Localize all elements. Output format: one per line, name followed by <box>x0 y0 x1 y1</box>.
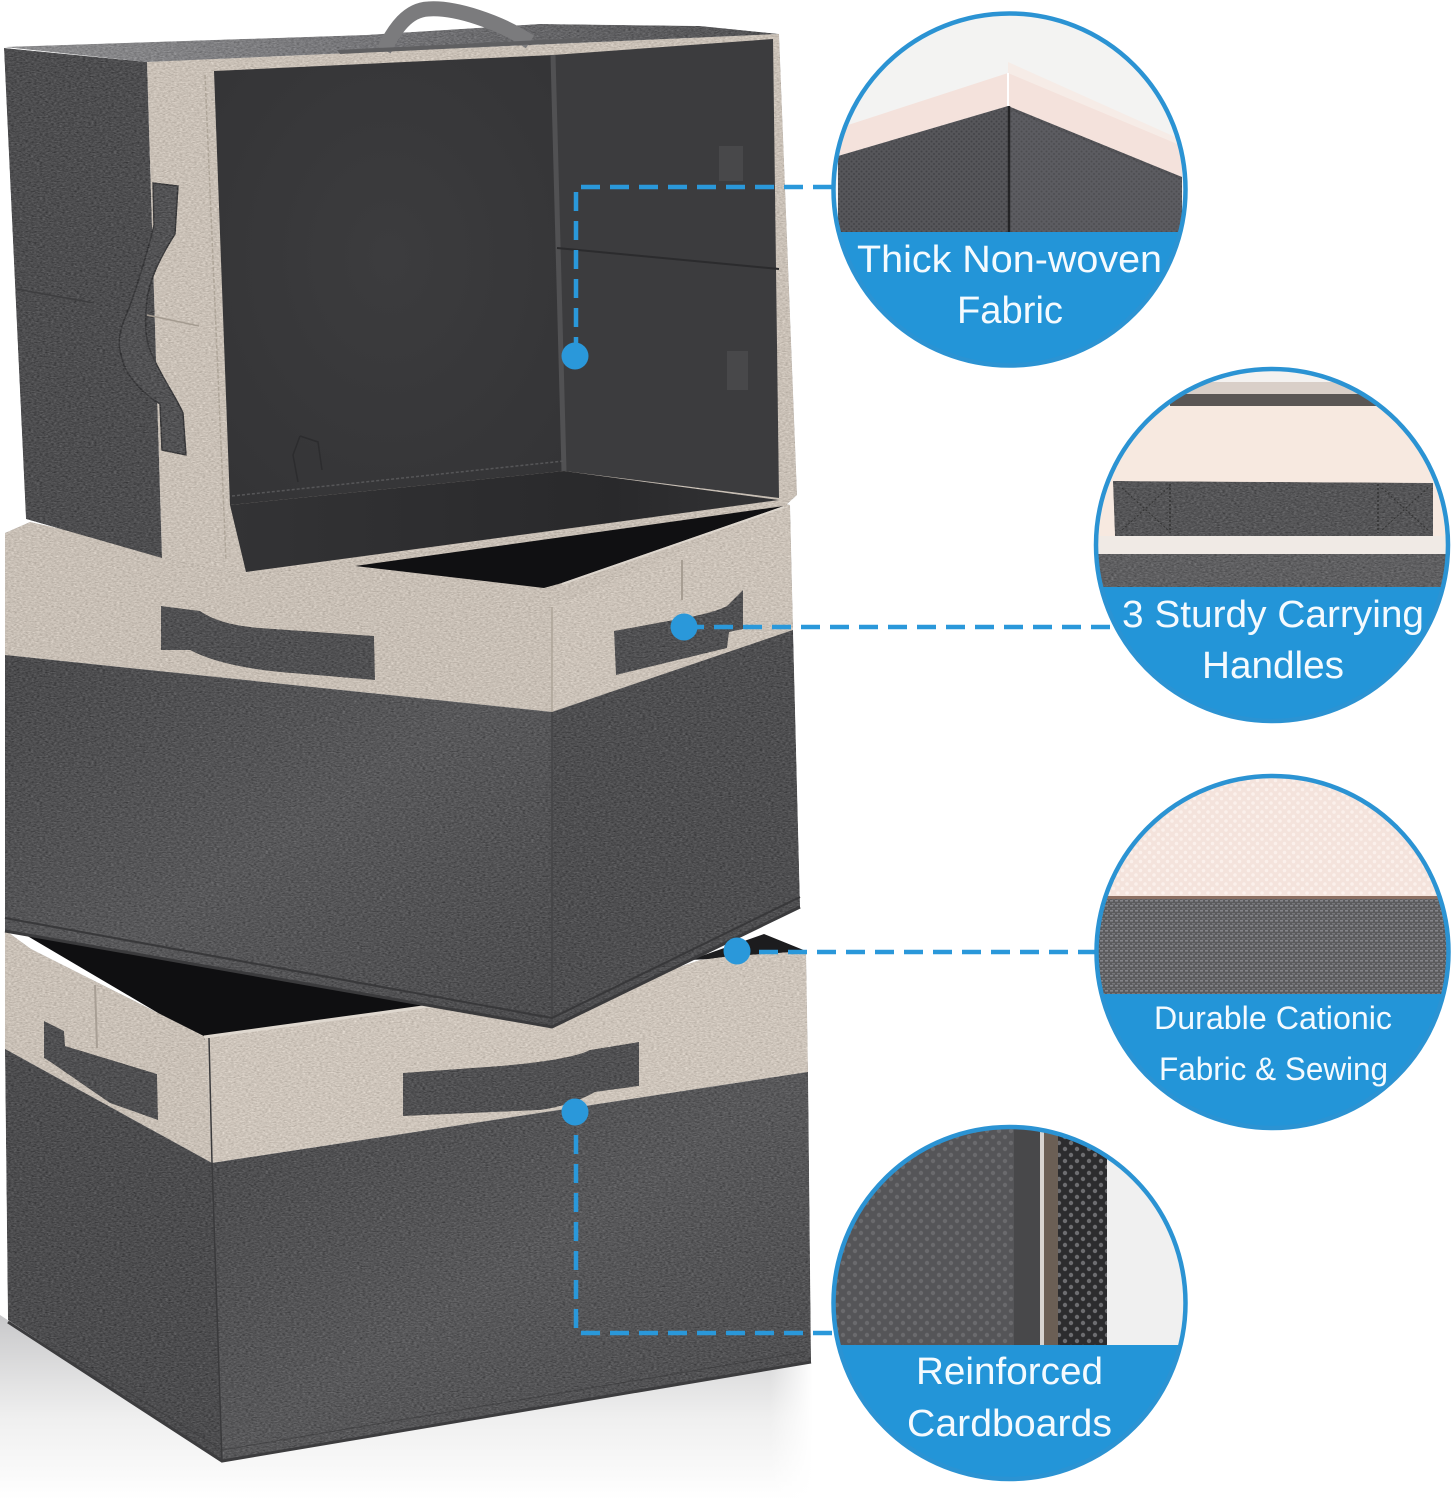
caption <box>1122 594 1424 687</box>
bottom bin fabric faces <box>5 930 811 1461</box>
detail photo: handle <box>1095 365 1450 727</box>
detail photo: fabric corner <box>830 10 1190 372</box>
callout line: reinforced cardboards <box>562 1098 832 1333</box>
top bin interior <box>214 39 779 572</box>
circle outline <box>1096 369 1448 721</box>
detail photo: woven fabric <box>1095 772 1451 1134</box>
caption <box>907 1351 1112 1445</box>
middle bin fabric faces <box>5 498 800 1026</box>
middle bin side handle <box>614 590 743 675</box>
middle storage bin <box>5 498 800 1027</box>
caption: Reinforced <box>916 1351 1103 1393</box>
caption: 3 Sturdy Carrying <box>1122 594 1424 636</box>
middle bin opening <box>355 506 784 588</box>
caption: Durable Cationic <box>1154 1000 1392 1036</box>
caption: Fabric <box>957 290 1063 332</box>
top bin carry handle <box>384 9 530 50</box>
circle outline <box>834 14 1186 366</box>
floor reflection <box>0 1315 813 1500</box>
panel: reinforced cardboards <box>830 1124 1190 1485</box>
top bin outer faces <box>4 24 797 576</box>
top bin fold lines <box>16 75 226 560</box>
caption: Handles <box>1202 645 1344 687</box>
top bin side handle <box>119 183 186 455</box>
callout line: carrying handles <box>670 614 1110 640</box>
bottom bin front handle <box>403 1042 639 1116</box>
caption: Thick Non-woven <box>857 239 1162 281</box>
middle bin seams <box>5 507 800 1027</box>
caption <box>1154 1000 1392 1087</box>
caption: Cardboards <box>907 1403 1112 1445</box>
top bin handle base strip <box>337 38 582 54</box>
top storage bin <box>4 9 797 576</box>
callout line: cationic fabric <box>724 938 1097 964</box>
caption: Fabric & Sewing <box>1159 1051 1388 1087</box>
bottom bin side handle <box>44 1021 158 1120</box>
callout line: non-woven fabric <box>562 187 832 370</box>
circle outline <box>834 1127 1186 1479</box>
panel: thick non-woven fabric <box>830 10 1190 372</box>
detail photo: cardboard edge <box>830 1124 1190 1485</box>
panel: sturdy carrying handles <box>1095 365 1450 727</box>
caption <box>857 239 1162 332</box>
bottom storage bin <box>5 930 811 1461</box>
panel: durable cationic fabric and sewing <box>1095 772 1451 1134</box>
middle bin front handle <box>161 606 375 680</box>
circle outline <box>1096 776 1448 1128</box>
bottom bin seams <box>8 985 811 1461</box>
bottom bin interior opening <box>24 934 806 1040</box>
